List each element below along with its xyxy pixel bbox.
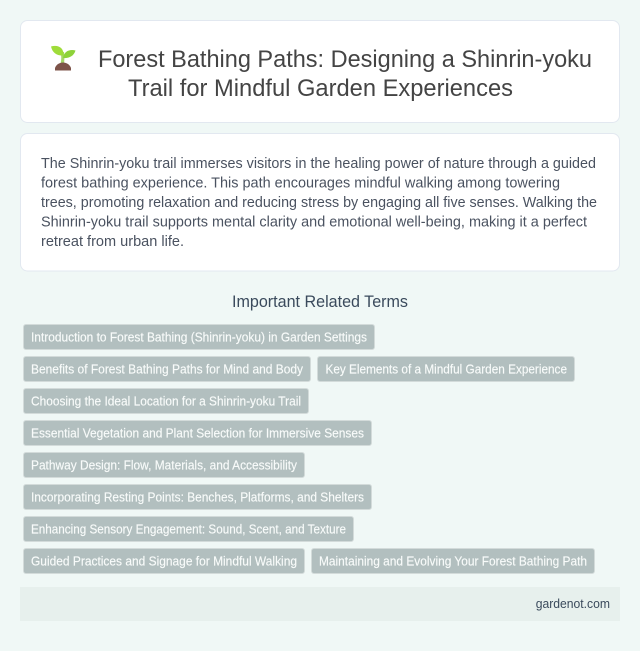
icon: sprout [51,46,76,70]
description text: trees, promoting relaxation and reducing stress by engaging all five senses. Walking the [41,194,597,211]
tag [312,548,594,574]
tag [24,484,372,510]
tag [24,452,304,478]
tag [24,420,372,446]
description text: Shinrin-yoku trail supports mental clarity and emotional well-being, making it a perfect [41,214,588,230]
description text: forest bathing experience. This path encourages mindful walking among towering [41,174,560,192]
title [98,46,592,102]
tag: Key Elements of a Mindful Garden Experience [326,362,567,376]
tag [24,324,374,350]
title: Trail for Mindful Garden Experiences [128,75,513,102]
tag [24,548,304,574]
tag: Pathway Design: Flow, Materials, and Accessibility [31,458,298,472]
tag: Essential Vegetation and Plant Selection for Immersive Senses [31,426,364,440]
tag [318,356,574,382]
title: Forest Bathing Paths: Designing a Shinrin-yoku [98,46,592,73]
footer: gardenot.com [536,596,610,611]
tag [24,356,310,382]
panel: header [20,20,620,122]
tag: Benefits of Forest Bathing Paths for Mind and Body [31,362,304,376]
tag: Introduction to Forest Bathing (Shinrin-yoku) in Garden Settings [31,330,367,344]
tag: Maintaining and Evolving Your Forest Bathing Path [319,554,587,568]
tag [24,516,354,542]
tag: Enhancing Sensory Engagement: Sound, Scent, and Texture [31,522,346,536]
panel: description [20,134,620,271]
heading: related terms: Important Related Terms [232,293,408,311]
footer [20,587,620,621]
tag: Guided Practices and Signage for Mindful Walking [31,554,297,568]
tag: Incorporating Resting Points: Benches, Platforms, and Shelters [31,490,364,504]
description text: The Shinrin-yoku trail immerses visitors in the healing power of nature through a guided [41,155,596,172]
tag: Choosing the Ideal Location for a Shinrin-yoku Trail [31,394,301,408]
description text: retreat from urban life. [41,233,184,250]
description text [41,155,597,250]
tag [24,388,308,414]
tag list [24,324,594,574]
